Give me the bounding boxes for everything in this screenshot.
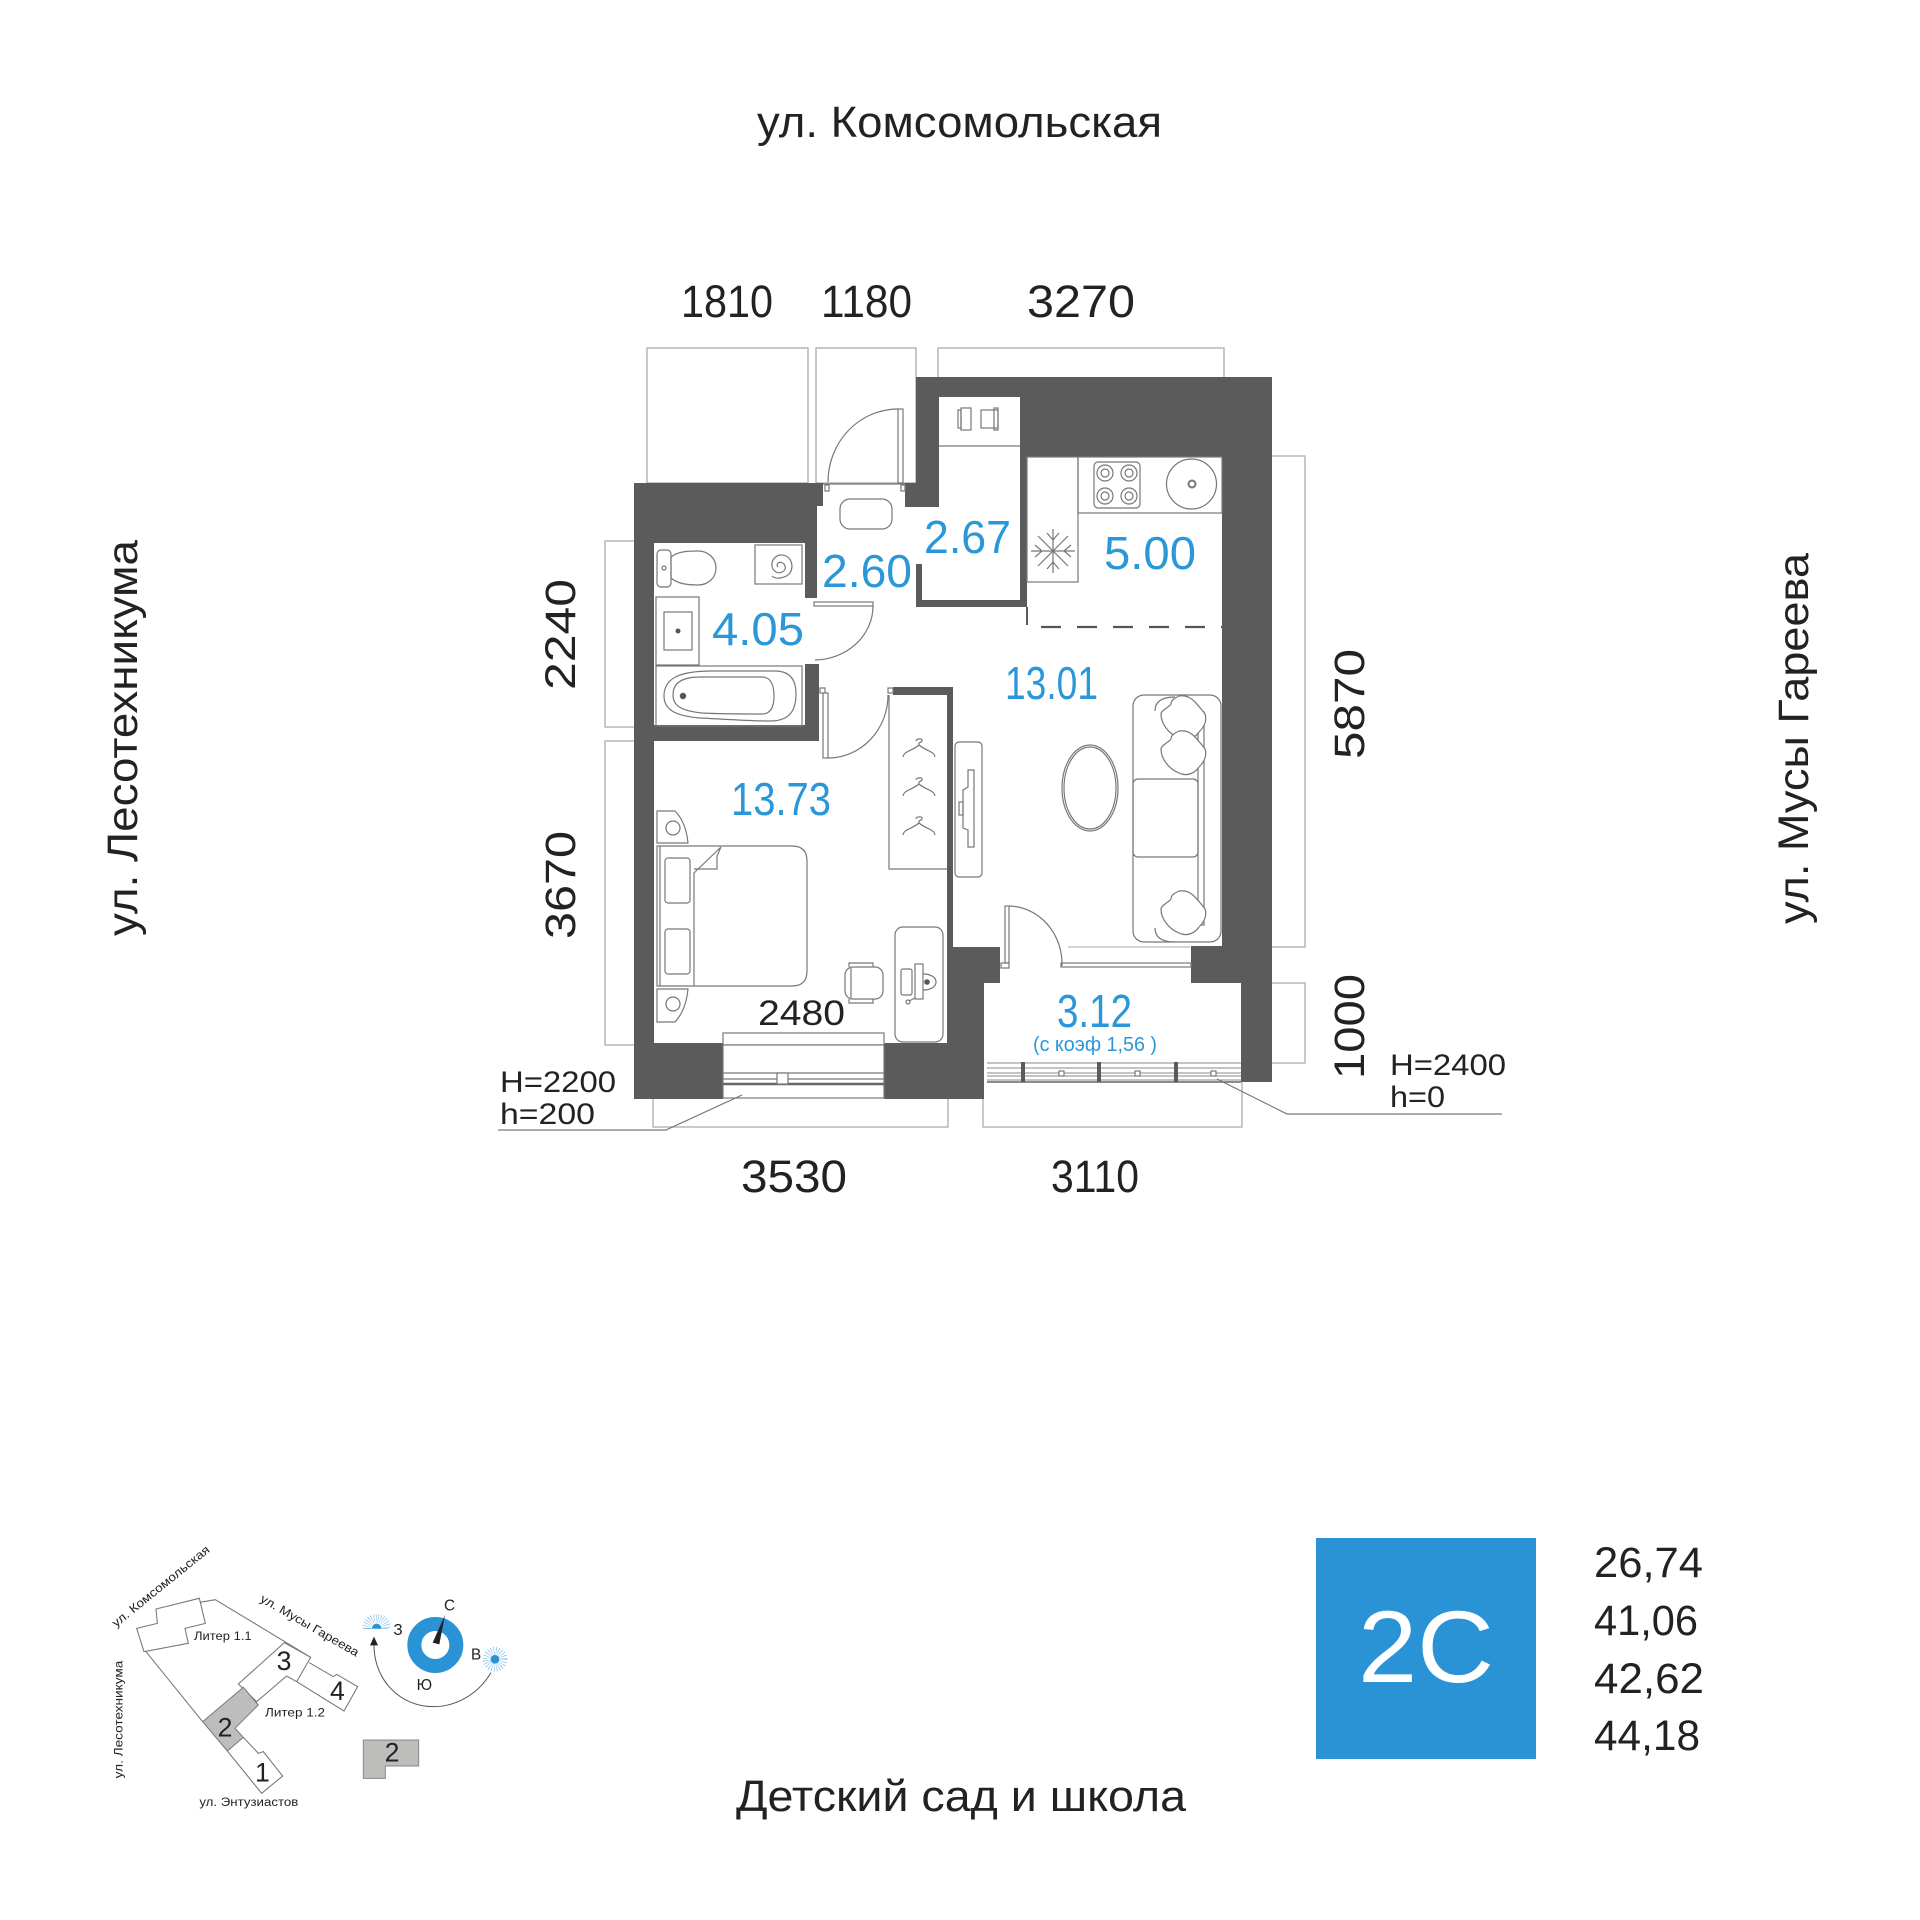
kitchen furniture (1027, 457, 1222, 582)
hob (1094, 462, 1140, 508)
dimensions: left: 3670 (537, 831, 585, 939)
window heights: right: H=2400 (1390, 1049, 1506, 1082)
street label: left: ул. Лесотехникума (99, 540, 147, 936)
key plan: ул. Лесотехникума (112, 1660, 126, 1778)
dimensions: right (1326, 649, 1374, 1079)
dimensions: bottom (741, 1151, 1139, 1202)
window heights: left: H=2200 (500, 1066, 616, 1099)
room areas: 4.05 (712, 603, 804, 655)
area figures (1594, 1539, 1704, 1760)
street label: right: ул. Мусы Гареева (1770, 553, 1818, 924)
area figures: 42,62 (1594, 1655, 1704, 1703)
bathroom door (814, 602, 873, 660)
window heights: right: h=0 (1390, 1081, 1445, 1114)
room areas: 2.60 (822, 545, 912, 597)
area figures: 41,06 (1594, 1597, 1698, 1645)
room areas (712, 511, 1196, 1056)
key plan: ул. Энтузиастов (199, 1795, 298, 1809)
sofa (1133, 695, 1221, 942)
room areas: 5.00 (1104, 527, 1196, 579)
bedroom door (820, 688, 893, 758)
snowflake (1031, 529, 1075, 573)
dimensions: right: 1000 (1326, 974, 1374, 1079)
room areas: 13.73 (731, 773, 831, 825)
dimension frames (605, 348, 1305, 1127)
compass: Ю (417, 1677, 432, 1694)
tv stand (955, 742, 982, 877)
key plan: 1 (255, 1758, 270, 1788)
key plan: 4 (330, 1676, 345, 1706)
bed and nightstands (657, 811, 807, 1022)
window width label: 2480 (758, 994, 845, 1033)
apartment type badge (1316, 1538, 1536, 1759)
entry door (823, 409, 905, 491)
dimensions: bottom: 3110 (1051, 1151, 1139, 1202)
compass: З (393, 1622, 403, 1639)
key plan: ул. Комсомольская (109, 1543, 212, 1630)
key plan: Литер 1.2 (265, 1706, 325, 1720)
dimensions: top: 1810 (681, 276, 773, 327)
dimensions: top (681, 276, 1135, 327)
wardrobe with hangers (889, 695, 947, 869)
room areas: 13.01 (1005, 657, 1098, 709)
key plan: Литер 1.1 (194, 1629, 252, 1643)
key plan: ул. Мусы Гареева (258, 1591, 362, 1660)
room areas: (с коэф 1,56 ) (1033, 1034, 1157, 1056)
street label: bottom: Детский сад и школа (736, 1772, 1187, 1821)
window heights: left: h=200 (500, 1098, 595, 1131)
loggia window (987, 1062, 1241, 1082)
key plan: 2 (218, 1713, 232, 1743)
area figures: 26,74 (1594, 1539, 1703, 1587)
dimensions: bottom: 3530 (741, 1151, 847, 1202)
window heights: left (500, 1066, 616, 1131)
room areas: 3.12 (1057, 985, 1132, 1037)
dimensions: top: 3270 (1027, 276, 1135, 327)
bedroom window (723, 1033, 884, 1098)
dimensions: top: 1180 (821, 276, 912, 327)
street label: top: ул. Комсомольская (757, 98, 1162, 147)
walls (634, 377, 1272, 1099)
compass: В (471, 1646, 481, 1663)
storage niche: shoe bench and boiler (840, 408, 1020, 529)
compass: С (444, 1598, 455, 1615)
dimensions: left (537, 579, 585, 939)
apartment type badge: 2С (1358, 1590, 1494, 1704)
kitchen zone divider (1041, 626, 1222, 628)
chair and desk (845, 927, 943, 1042)
bathroom fixtures (656, 545, 802, 726)
balcony door and window (1001, 906, 1191, 968)
compass (365, 1598, 503, 1707)
dimensions: right: 5870 (1326, 649, 1374, 759)
dining table (1062, 745, 1118, 831)
key plan: 2 (385, 1738, 399, 1768)
dimensions: left: 2240 (537, 579, 585, 690)
window heights: right (1390, 1049, 1506, 1114)
key plan (109, 1543, 503, 1809)
room areas: 2.67 (924, 511, 1011, 563)
sink (1166, 459, 1216, 509)
key plan: 3 (277, 1646, 291, 1676)
leader lines (498, 1079, 1502, 1130)
area figures: 44,18 (1594, 1712, 1700, 1760)
